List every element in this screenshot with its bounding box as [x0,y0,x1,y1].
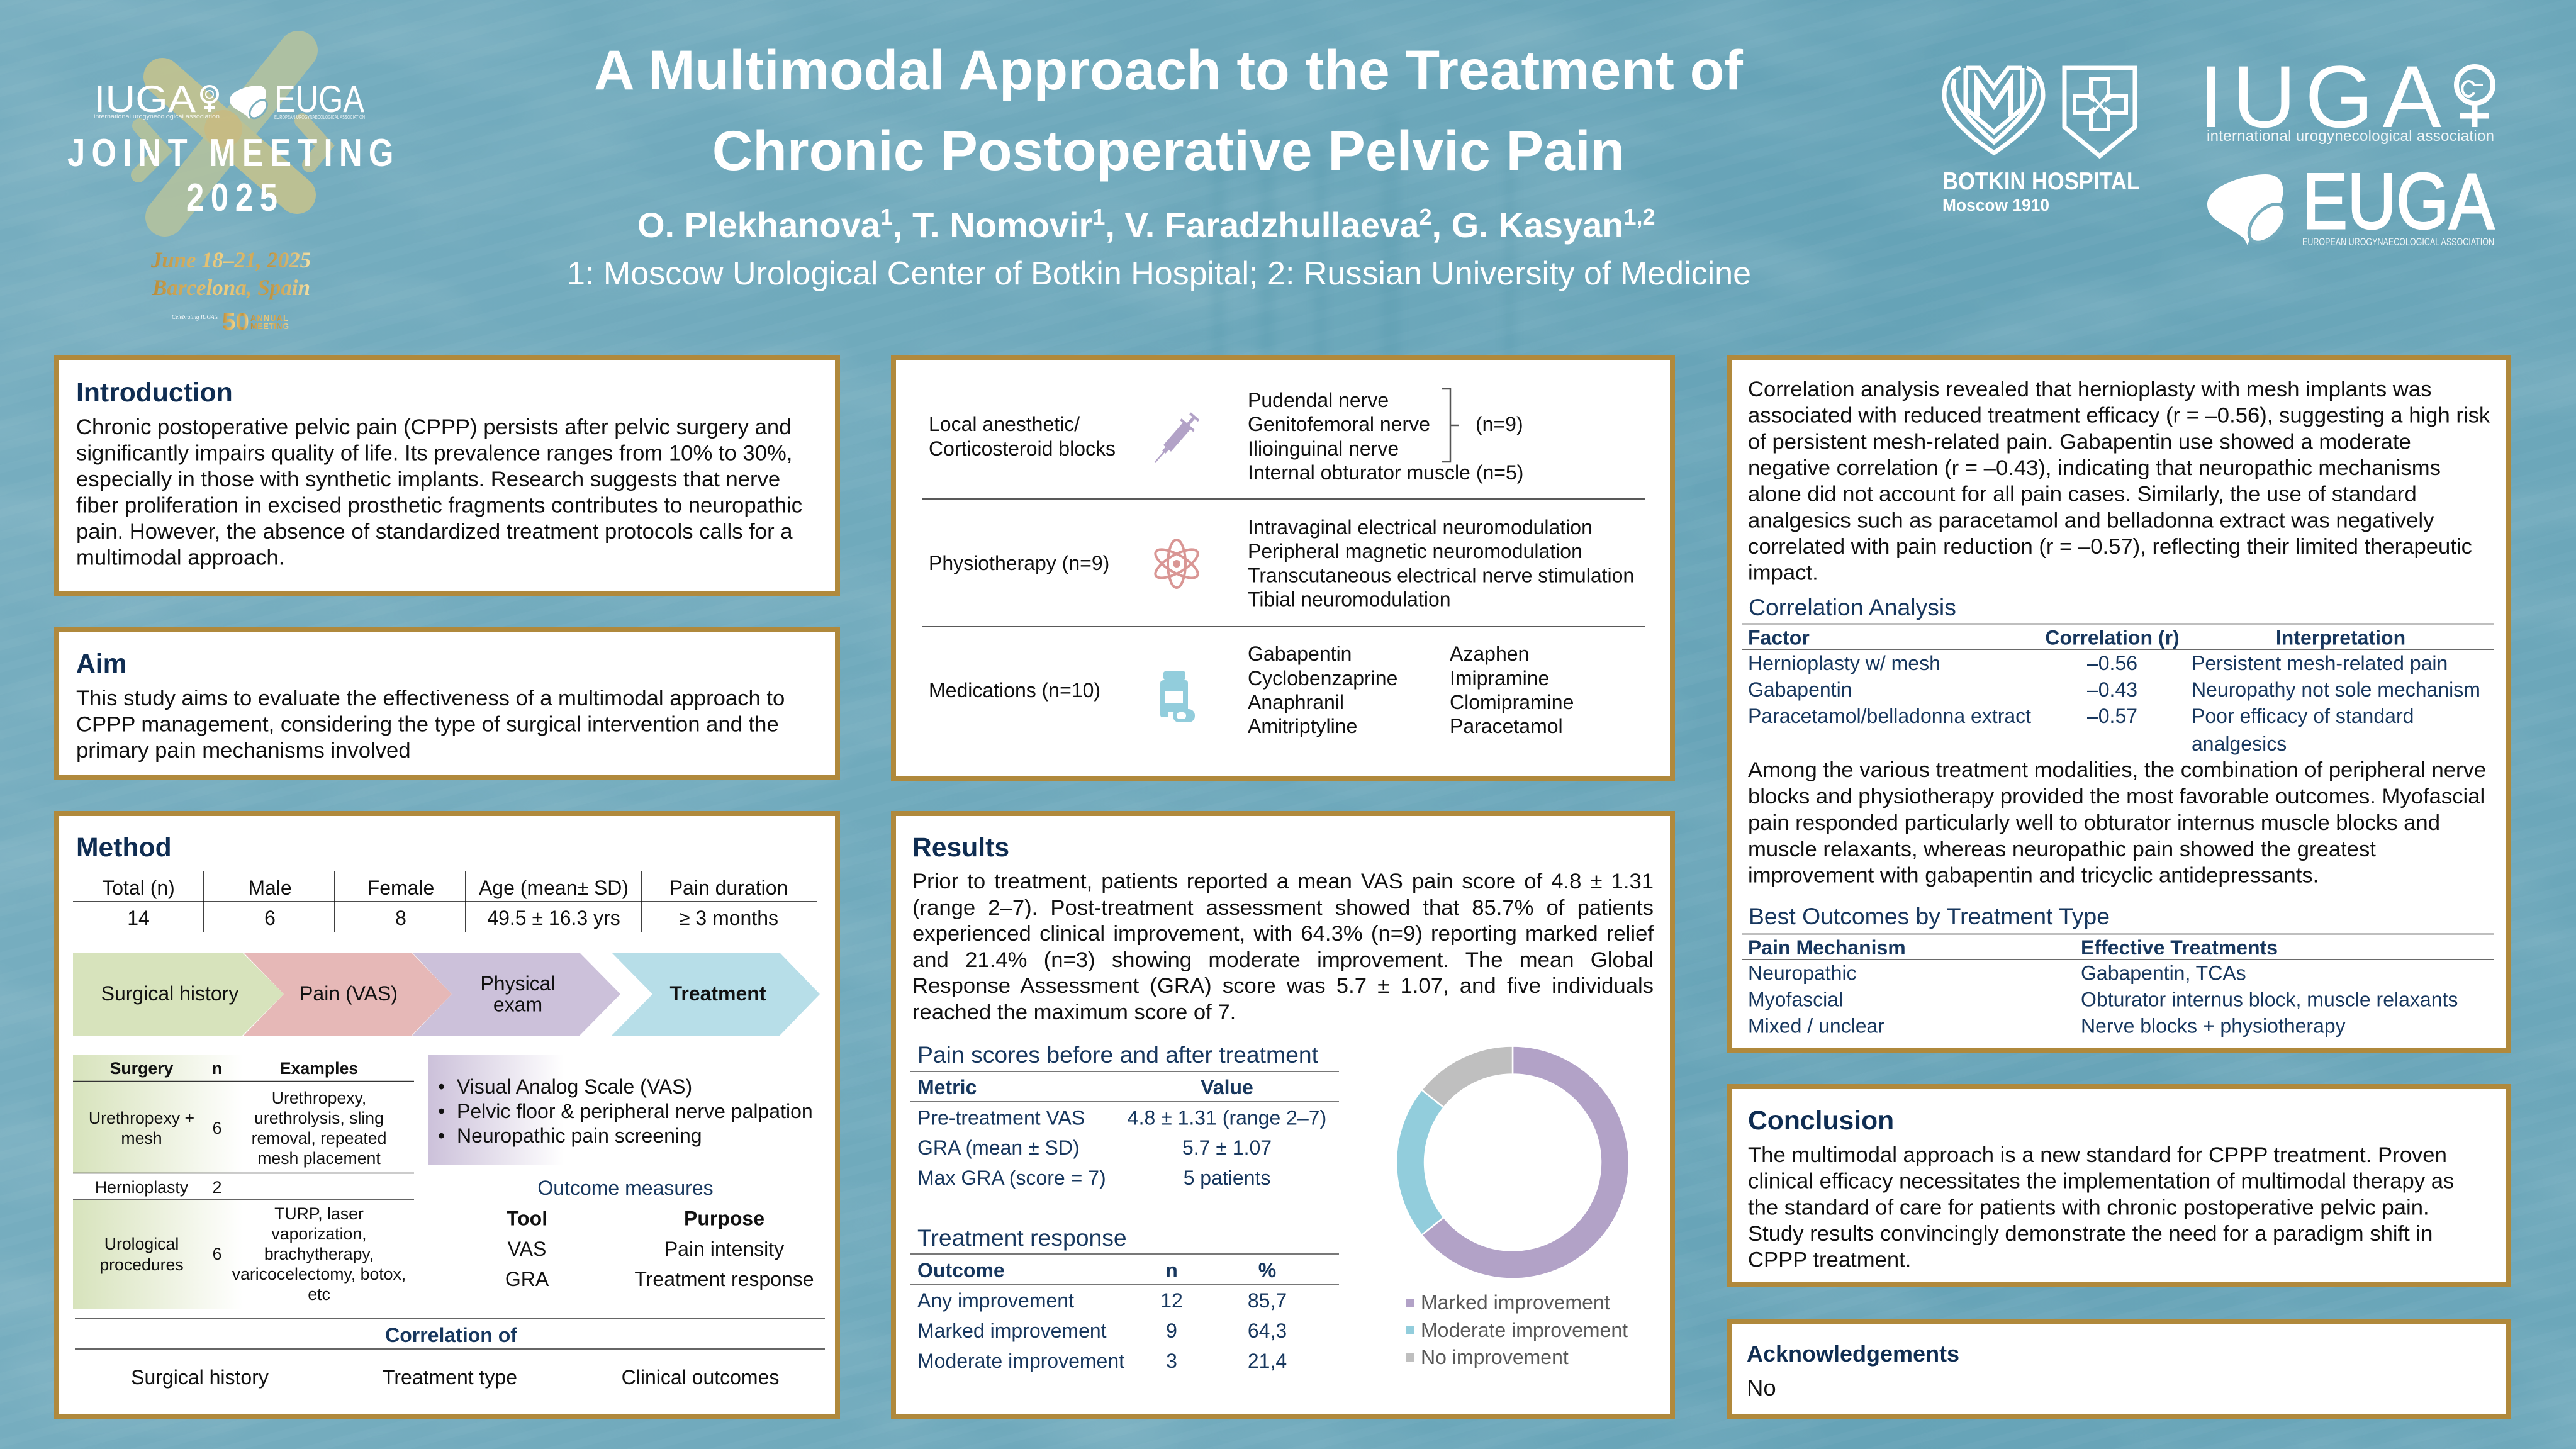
authors: , T. Nomovir [893,205,1092,245]
table: surgery types: Hernioplasty [95,1178,189,1197]
icon: atom [1151,540,1202,588]
arrow: treatment: Treatment [670,982,766,1005]
legend: Marked improvement [1421,1291,1610,1314]
panel: method [57,814,837,1417]
icon: bladder large [2207,174,2292,249]
table: surgery types: n [212,1059,222,1078]
table: outcome measures: Pain intensity [664,1238,784,1260]
hospital name: BOTKIN HOSPITAL [1942,168,2140,195]
table: surgery types: procedures [99,1255,184,1274]
row: medications: Gabapentin [1248,642,1352,665]
text: conclusion body: clinical efficacy necessitates the implementation of multimodal therapy as [1748,1170,2454,1194]
icon: heart M emblem [1944,68,2043,153]
table: surgery types: 2 [213,1178,221,1197]
table: best outcomes by treatment type [1742,903,2494,1037]
icon: syringe [1148,410,1202,468]
text: conclusion body: the standard of care for patients with chronic postoperative pelvic pain. [1748,1195,2429,1219]
table: surgery types: Urethropexy, [272,1088,366,1107]
authors: O. Plekhanova [637,205,880,245]
year: 2025 [186,176,284,220]
table: demographics: ≥ 3 months [679,907,778,929]
table: best outcomes by treatment type: Best Outcomes by Treatment Type [1749,903,2110,929]
logo: IUGA EUGA Joint Meeting 2025 [67,50,400,335]
table: correlation analysis: –0.57 [2087,705,2137,727]
table: surgery types: removal, repeated [252,1129,386,1148]
legend [1406,1291,1628,1368]
icon: shield with cross [2064,68,2135,156]
section: correlation of: Correlation of [385,1324,517,1346]
list: physical exam components [428,1055,813,1165]
row: physiotherapy: Peripheral magnetic neuromodulation [1248,540,1582,562]
text: best modalities narrative: improvement with gabapentin and tricyclic antidepressants. [1748,863,2319,887]
text: introduction body [76,415,802,570]
heading: conclusion: Conclusion [1748,1105,1894,1136]
row: medications: Medications (n=10) [929,679,1100,702]
table: correlation analysis: Persistent mesh-related pain [2192,652,2448,674]
panel: correlation and best outcomes [1730,357,2509,1051]
table: outcome measures: Treatment response [634,1268,814,1290]
table: demographics: Total (n) [102,876,175,899]
table: surgery types: varicocelectomy, botox, [232,1265,406,1284]
table: surgery types: Urethropexy + [89,1109,194,1127]
text: conclusion body: Study results convincingly demonstrate the need for a paradigm shift in [1748,1222,2433,1246]
table: correlation analysis: Interpretation [2276,627,2405,649]
table: outcome measures [505,1177,814,1290]
text: correlation narrative: analgesics such as paracetamol and belladonna extract was negatively [1748,508,2434,532]
text: conclusion body: The multimodal approach is a new standard for CPPP treatment. Proven [1748,1143,2447,1167]
table: best outcomes by treatment type: Neuropathic [1748,962,1857,985]
table: treatment response: 12 [1160,1289,1183,1312]
affiliations: 1: Moscow Urological Center of Botkin Hospital; 2: Russian University of Medicine [567,255,1751,292]
arrow: pain VAS [244,953,452,1036]
text: results body: (range 2–7). Post-treatment assessment showed that 85.7% of patients [912,896,1654,920]
text: results body [912,869,1661,1032]
panel: treatment modalities [893,357,1672,778]
table: surgery types [73,1055,414,1309]
table: surgery types: etc [308,1285,330,1304]
table: demographics: Age (mean± SD) [479,876,629,899]
heading: introduction: Introduction [76,378,233,408]
text: best modalities narrative: Among the various treatment modalities, the combination of peripheral nerve [1748,758,2486,782]
row: local anesthetic blocks: Ilioinguinal nerve [1248,437,1399,460]
authors: , V. Faradzhullaeva [1105,205,1420,245]
list: physical exam components: • [438,1100,445,1122]
table: treatment response: Moderate improvement [917,1350,1124,1372]
table: pain scores: Metric [917,1076,977,1099]
text: results body: experienced clinical improvement, with 64.3% (n=9) reporting marked relief [912,922,1654,946]
section: correlation of: Surgical history [131,1366,269,1389]
heading: acknowledgements: Acknowledgements [1747,1341,1959,1367]
50th annual meeting mark: 50 [222,309,249,335]
list: physical exam components: • [438,1124,445,1147]
text: correlation narrative: correlated with pain reduction (r = –0.57), reflecting their limited therapeutic [1748,535,2472,559]
chart: treatment outcome donut [1396,1046,1629,1278]
table: correlation analysis: Correlation (r) [2045,627,2180,649]
text: best modalities narrative: muscle relaxants, whereas neuropathic pain showed the greatest [1748,837,2376,861]
table: correlation analysis: Poor efficacy of standard [2192,705,2414,727]
row: physiotherapy [929,516,1634,610]
text: correlation narrative: alone did not account for all pain cases. Similarly, the use of standard [1748,483,2417,506]
text: results body: Prior to treatment, patients reported a mean VAS pain score of 4.8 ± 1.31 [912,870,1654,893]
text: results body: Response Assessment (GRA) score was 5.7 ± 1.07, and five individuals [912,974,1654,998]
title: Chronic Postoperative Pelvic Pain [712,119,1625,182]
table: demographics: 14 [127,907,150,929]
row: physiotherapy: Tibial neuromodulation [1248,588,1451,610]
table: surgery types: Surgery [110,1059,174,1078]
list: physical exam components: • [438,1075,445,1098]
table: surgery types: TURP, laser [274,1204,364,1223]
section: correlation of [75,1319,825,1389]
text: best modalities narrative: pain responded particularly well to obturator internus muscle blocks and [1748,811,2440,835]
table: correlation analysis: analgesics [2192,732,2287,755]
table: treatment response: n [1165,1259,1178,1282]
50th annual meeting mark: MEETING [250,322,289,331]
arrow: surgical history [73,953,284,1036]
title: A Multimodal Approach to the Treatment of [594,38,1743,101]
text: introduction body: multimodal approach. [76,546,284,570]
icon: bladder [230,86,271,121]
panel: results [893,814,1672,1417]
text: results body: and 21.4% (n=3) showing moderate improvement. The mean Global [912,948,1654,972]
table: outcome measures: Purpose [684,1207,764,1229]
table: surgery types: mesh [121,1129,162,1148]
text: aim body: CPPP management, considering the type of surgical intervention and the [76,712,779,736]
table: treatment response: Any improvement [917,1289,1074,1312]
table: outcome measures: VAS [508,1238,546,1260]
EUGA subtitle: EUROPEAN UROGYNAECOLOGICAL ASSOCIATION [274,115,365,120]
row: local anesthetic blocks: Local anesthetic/ [929,413,1080,435]
legend: Moderate improvement [1421,1319,1628,1341]
EUGA wordmark: EUGA [274,78,364,120]
arrow: treatment [612,953,820,1036]
text: introduction body: significantly impairs quality of life. Its prevalence ranges from 10% to 30%, [76,442,792,466]
arrow: surgical history: Surgical history [101,982,238,1005]
table: pain scores: 5 patients [1184,1166,1270,1189]
text: correlation narrative [1748,378,2490,585]
text: correlation narrative: of persistent mesh-related pain. Gabapentin use showed a moderate [1748,430,2411,454]
heading: method: Method [76,832,172,863]
text: aim body: This study aims to evaluate the effectiveness of a multimodal approach to [76,686,785,710]
row: local anesthetic blocks: Internal obturator muscle (n=5) [1248,461,1523,484]
text: correlation narrative: negative correlation (r = –0.43), indicating that neuropathic mechanisms [1748,456,2441,480]
authors: 2 [1419,204,1431,230]
table: correlation analysis: –0.56 [2087,652,2137,674]
table: best outcomes by treatment type: Myofascial [1748,988,1843,1010]
table: pain scores: Value [1201,1076,1253,1099]
table: surgery types: mesh placement [257,1149,381,1168]
text: correlation narrative: impact. [1748,561,1818,585]
logo: IUGA: IUGA [2199,47,2442,146]
text: acknowledgements body: No [1747,1375,1776,1401]
location: Barcelona, Spain [152,275,310,300]
50th annual meeting mark: ANNUAL [250,313,288,323]
icon: female symbol [201,86,218,112]
table: correlation analysis: Correlation Analysis [1749,594,1956,620]
row: medications: Amitriptyline [1248,715,1357,737]
table: surgery types: vaporization, [271,1224,367,1243]
row: local anesthetic blocks: Pudendal nerve [1248,389,1389,411]
table: correlation analysis: Neuropathy not sole mechanism [2192,678,2480,701]
text: conclusion body: CPPP treatment. [1748,1248,1911,1272]
text: best modalities narrative [1748,758,2486,887]
heading: results: Results [912,832,1009,863]
logo: EUGA [2207,158,2495,249]
heading: aim: Aim [76,649,127,679]
row: local anesthetic blocks [929,389,1523,484]
panel: introduction [57,357,837,593]
row: medications: Paracetamol [1450,715,1563,737]
icon: medicine bottle [1160,671,1195,722]
text: conclusion body [1748,1143,2454,1272]
text: introduction body: fiber proliferation in excised prosthetic fragments contributes to neuropathic [76,493,802,517]
list: physical exam components: Neuropathic pain screening [457,1124,702,1147]
bracket [1442,389,1459,462]
text: results body: reached the maximum score of 7. [912,1000,1236,1024]
IUGA subtitle: international urogynecological association [94,113,220,120]
title [594,38,1743,182]
text: aim body [76,686,785,763]
IUGA wordmark: IUGA [94,78,196,120]
table: pain scores: Max GRA (score = 7) [917,1166,1106,1189]
hospital subtitle: Moscow 1910 [1942,196,2049,215]
table: best outcomes by treatment type: Nerve blocks + physiotherapy [2081,1014,2346,1037]
list: physical exam components: Pelvic floor & peripheral nerve palpation [457,1100,813,1122]
icon: female symbol large [2456,67,2493,127]
table: best outcomes by treatment type: Effective Treatments [2081,936,2278,959]
panel: aim [57,629,837,778]
logo: EUGA: EUROPEAN UROGYNAECOLOGICAL ASSOCIATION [2302,236,2494,248]
table: correlation analysis: Hernioplasty w/ mesh [1748,652,1940,674]
table: pain scores: Pain scores before and after treatment [917,1041,1319,1068]
arrow: physical exam: exam [493,993,542,1015]
table: pain scores: 4.8 ± 1.31 (range 2–7) [1128,1106,1326,1129]
text: aim body: primary pain mechanisms involved [76,739,411,763]
arrow: pain VAS: Pain (VAS) [300,982,398,1005]
table: demographics: 6 [264,907,276,929]
table: surgery types: 6 [213,1119,221,1138]
icon: gold X emblem [138,50,325,217]
section: correlation of: Treatment type [383,1366,517,1389]
list: physical exam components: Visual Analog Scale (VAS) [457,1075,692,1098]
table: correlation analysis: Paracetamol/belladonna extract [1748,705,2031,727]
row: physiotherapy: Transcutaneous electrical nerve stimulation [1248,564,1634,586]
table: treatment response: Outcome [917,1259,1005,1282]
flow: assessment to treatment arrows [73,953,820,1036]
authors: 1 [880,204,893,230]
row: medications: Clomipramine [1450,691,1574,713]
table: outcome measures: Outcome measures [537,1177,714,1199]
logo: Botkin Hospital [1942,68,2140,215]
table: correlation analysis: Factor [1748,627,1810,649]
text: best modalities narrative: blocks and physiotherapy provided the most favorable outcomes. Myofascial [1748,785,2485,808]
50th annual meeting mark: Celebrating IUGA's [172,313,218,321]
table: best outcomes by treatment type: Obturator internus block, muscle relaxants [2081,988,2458,1010]
table: best outcomes by treatment type: Pain Mechanism [1748,936,1906,959]
table: best outcomes by treatment type: Gabapentin, TCAs [2081,962,2246,985]
table: treatment response: 64,3 [1248,1319,1287,1342]
table: pain scores: GRA (mean ± SD) [917,1136,1080,1159]
table: surgery types: Examples [280,1059,358,1078]
panel: acknowledgements [1730,1322,2509,1417]
arrow: physical exam: Physical [480,972,556,995]
table: outcome measures: GRA [505,1268,549,1290]
table: surgery types: Urological [104,1234,179,1253]
table: treatment response: 3 [1166,1350,1177,1372]
text: introduction body: especially in those with synthetic implants. Research suggests that nerve [76,467,780,491]
row: local anesthetic blocks: (n=9) [1476,413,1523,435]
table: pain scores: 5.7 ± 1.07 [1182,1136,1272,1159]
table: correlation analysis [1742,594,2494,755]
table: treatment response: 21,4 [1248,1350,1287,1372]
arrow: physical exam [412,953,620,1036]
table: treatment response: Treatment response [917,1224,1127,1251]
table: best outcomes by treatment type: Mixed / unclear [1748,1014,1884,1037]
row: physiotherapy: Physiotherapy (n=9) [929,552,1109,574]
section: correlation of: Clinical outcomes [622,1366,779,1389]
logo: IUGA: international urogynecological association [2207,128,2494,145]
text: correlation narrative: associated with reduced treatment efficacy (r = –0.56), suggesting a high risk [1748,404,2490,428]
text: introduction body: pain. However, the absence of standardized treatment protocols calls for a [76,520,793,544]
table: treatment response: Marked improvement [917,1319,1107,1342]
authors: 1 [1092,204,1105,230]
table: treatment response: 9 [1166,1319,1177,1342]
authors: , G. Kasyan [1431,205,1624,245]
table: surgery types: urethrolysis, sling [254,1109,384,1127]
table: demographics: 49.5 ± 16.3 yrs [487,907,620,929]
table: demographics: Female [367,876,434,899]
table: surgery types: 6 [213,1245,221,1263]
table: demographics [73,871,817,932]
row: medications: Anaphranil [1248,691,1344,713]
row: physiotherapy: Intravaginal electrical neuromodulation [1248,516,1593,539]
table: pain scores [910,1041,1339,1189]
text: introduction body: Chronic postoperative pelvic pain (CPPP) persists after pelvic surgery and [76,415,791,439]
logo: EUGA: EUGA [2302,158,2495,245]
joint meeting label: JOINT MEETING [67,131,400,175]
dates: June 18–21, 2025 [150,247,311,272]
row: local anesthetic blocks: Corticosteroid blocks [929,437,1116,460]
table: treatment response: 85,7 [1248,1289,1287,1312]
row: medications [929,642,1574,737]
text: correlation narrative: Correlation analysis revealed that hernioplasty with mesh implants was [1748,378,2431,401]
table: demographics: Pain duration [669,876,788,899]
legend: No improvement [1421,1346,1569,1368]
row: medications: Cyclobenzaprine [1248,667,1397,690]
panel: conclusion [1730,1087,2509,1285]
row: medications: Imipramine [1450,667,1549,690]
row: local anesthetic blocks: Genitofemoral nerve [1248,413,1430,435]
table: treatment response: % [1258,1259,1276,1282]
table: demographics: 8 [395,907,406,929]
table: surgery types: brachytherapy, [264,1245,374,1263]
row: medications: Azaphen [1450,642,1529,665]
table: correlation analysis: Gabapentin [1748,678,1852,701]
table: treatment response [910,1224,1339,1372]
table: demographics: Male [248,876,292,899]
table: outcome measures: Tool [507,1207,547,1229]
50th annual meeting mark [172,309,289,335]
authors: 1,2 [1624,204,1655,230]
table: pain scores: Pre-treatment VAS [917,1106,1085,1129]
table: correlation analysis: –0.43 [2087,678,2137,701]
